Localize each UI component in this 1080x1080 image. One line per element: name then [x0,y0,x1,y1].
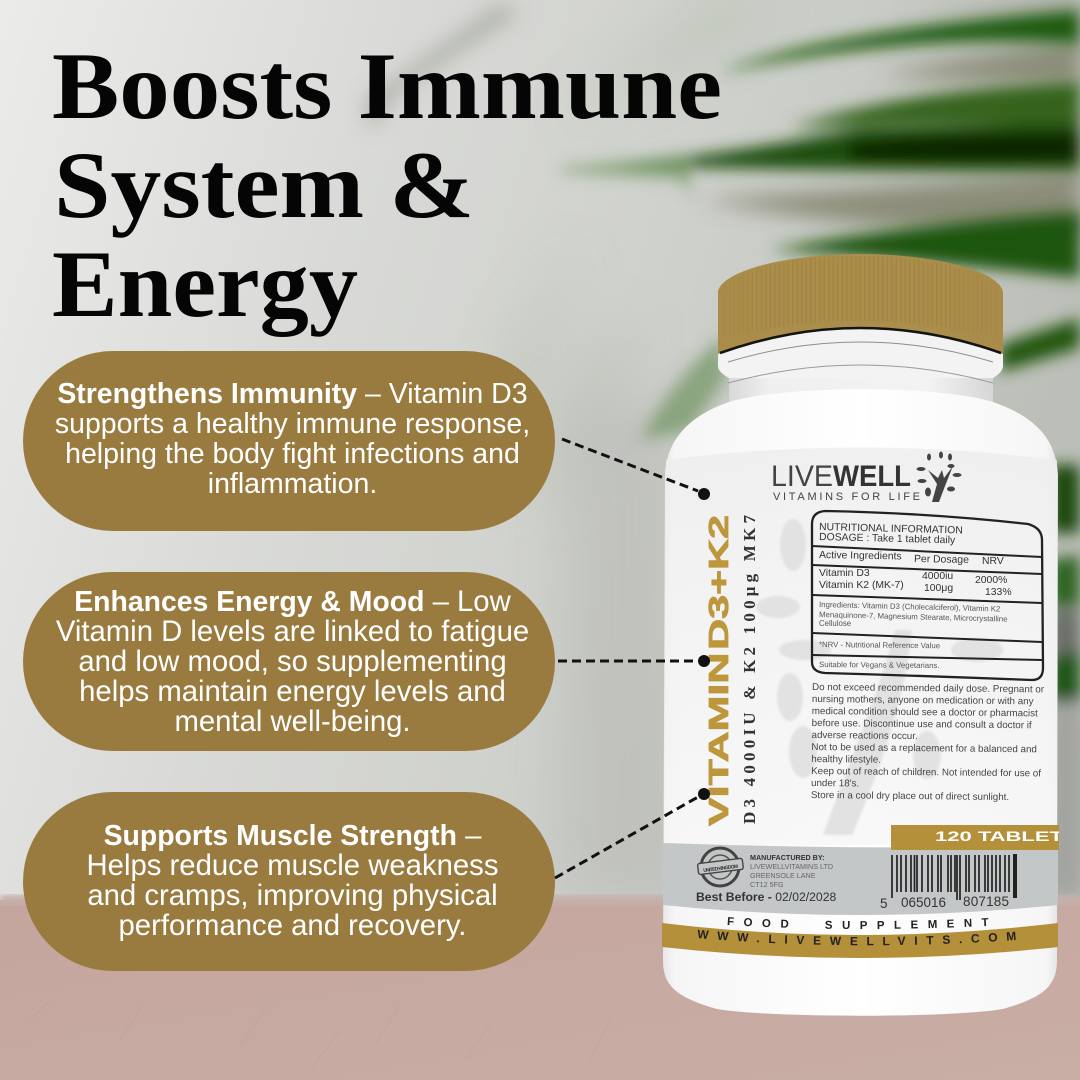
panel: enhances energy and mood [23,572,555,751]
logo: WELL [833,460,911,493]
grey fronds on the wall [365,0,1080,235]
nutrition table: DOSAGE : Take 1 tablet daily [819,532,956,546]
title: Energy [52,231,358,337]
gold band with url: WWW.LIVEWELLVITS.COM [698,930,1016,946]
panel: strengthens immunity: inflammation. [208,468,377,500]
nutrition table: *NRV - Nutritional Reference Value [819,640,940,650]
warnings text: Not to be used as a replacement for a balanced and [811,742,1037,755]
warnings text: before use. Discontinue use and consult a doctor if [812,718,1032,731]
panel: strengthens immunity: supports a healthy immune response, [55,408,530,440]
gold band with url [662,923,1058,958]
tablets tag: 120 TABLET [935,828,1064,844]
bottle collar ring [718,322,1003,378]
panel: strengthens immunity: helping the body fight infections and [65,438,520,470]
manufacturer text: LIVEWELLVITAMINS LTD [750,862,833,871]
made in UK stamp [697,848,743,886]
panel: supports muscle strength: Helps reduce muscle weakness [86,848,498,882]
nutrition table [812,511,1043,680]
barcode: 5 [880,896,888,911]
title: System & [54,132,474,238]
manufacturer text [750,853,833,889]
made in UK stamp: UNITED KINGDOM [703,864,738,874]
bottle [662,254,1059,1016]
warnings text: adverse reactions occur. [811,730,918,742]
panel: enhances energy and mood: mental well-being. [174,704,411,738]
nutrition table: Menaquinone-7, Magnesium Stearate, Microcrystalline [819,610,1008,624]
watermark tree [756,519,1003,835]
nutrition table: Vitamin K2 (MK-7) [819,580,904,591]
title [52,33,722,337]
nutrition table: Per Dosage [914,554,969,566]
nutrition table: Active Ingredients [819,550,902,562]
barcode: 807185 [963,894,1009,909]
panel: strengthens immunity: Strengthens Immunity – Vitamin D3 [57,378,528,410]
bottle body [663,389,1058,1016]
nutrition table: Ingredients: Vitamin D3 (Cholecalciferol), Vitamin K2 [819,600,1000,613]
manufacturer text: CT12 5FG [750,880,784,889]
tablets tag [891,825,1064,850]
manufacturer text: MANUFACTURED BY: [750,853,825,862]
panel: enhances energy and mood: Vitamin D levels are linked to fatigue [56,614,529,648]
grey info band [663,843,1058,915]
panel: supports muscle strength: Supports Muscle Strength – [104,818,481,852]
logo [771,452,962,503]
warnings text: medical condition should see a doctor or pharmacist [812,706,1038,719]
nutrition table: 2000% [975,575,1007,586]
warnings text: Keep out of reach of children. Not intended for use of [811,766,1041,779]
warnings text: under 18's. [811,778,859,789]
vertical product name: VITAMIN D3+K2 [703,515,734,826]
barcode [880,854,1017,911]
palm leaves [560,10,1080,895]
panel: enhances energy and mood: and low mood, so supplementing [78,644,507,678]
warnings text: nursing mothers, anyone on medication or with any [812,694,1034,707]
logo: LIVE [771,460,833,493]
nutrition table: 4000iu [922,571,953,582]
barcode: 065016 [901,895,946,910]
grey label tint [664,448,1057,845]
nutrition table: 133% [985,587,1012,598]
panel: enhances energy and mood: helps maintain energy levels and [79,674,506,708]
warnings text: healthy lifestyle. [811,754,881,766]
nutrition table: 100μg [924,583,953,594]
floor [0,900,1080,1080]
vertical dosage: D3 4000IU & K2 100μg MK7 [740,514,759,824]
nutrition table: Cellulose [819,619,851,628]
nutrition table: Vitamin D3 [819,568,870,579]
logo tree icon [916,452,962,502]
nutrition table: NRV [982,556,1004,567]
warnings text [811,682,1045,803]
best before: Best Before - 02/02/2028 [696,890,836,904]
nutrition table: Suitable for Vegans & Vegetarians. [819,660,940,670]
food supplement: FOOD SUPPLEMENT [728,917,988,929]
nutrition table: NUTRITIONAL INFORMATION [819,522,963,537]
manufacturer text: GREENSOLE LANE [750,871,816,880]
bottle neck [729,355,993,410]
bottle cap [718,254,1003,354]
title: Boosts Immune [52,33,722,139]
warnings text: Do not exceed recommended daily dose. Pregnant or [812,682,1045,695]
panel: supports muscle strength: and cramps, improving physical [87,878,498,912]
panel: supports muscle strength [23,792,555,971]
panel: strengthens immunity [23,351,555,531]
panel: enhances energy and mood: Enhances Energy & Mood – Low [74,584,511,618]
warnings text: Store in a cool dry place out of direct sunlight. [811,790,1009,803]
panel: supports muscle strength: performance and recovery. [119,908,466,942]
logo: VITAMINS FOR LIFE [773,491,920,503]
